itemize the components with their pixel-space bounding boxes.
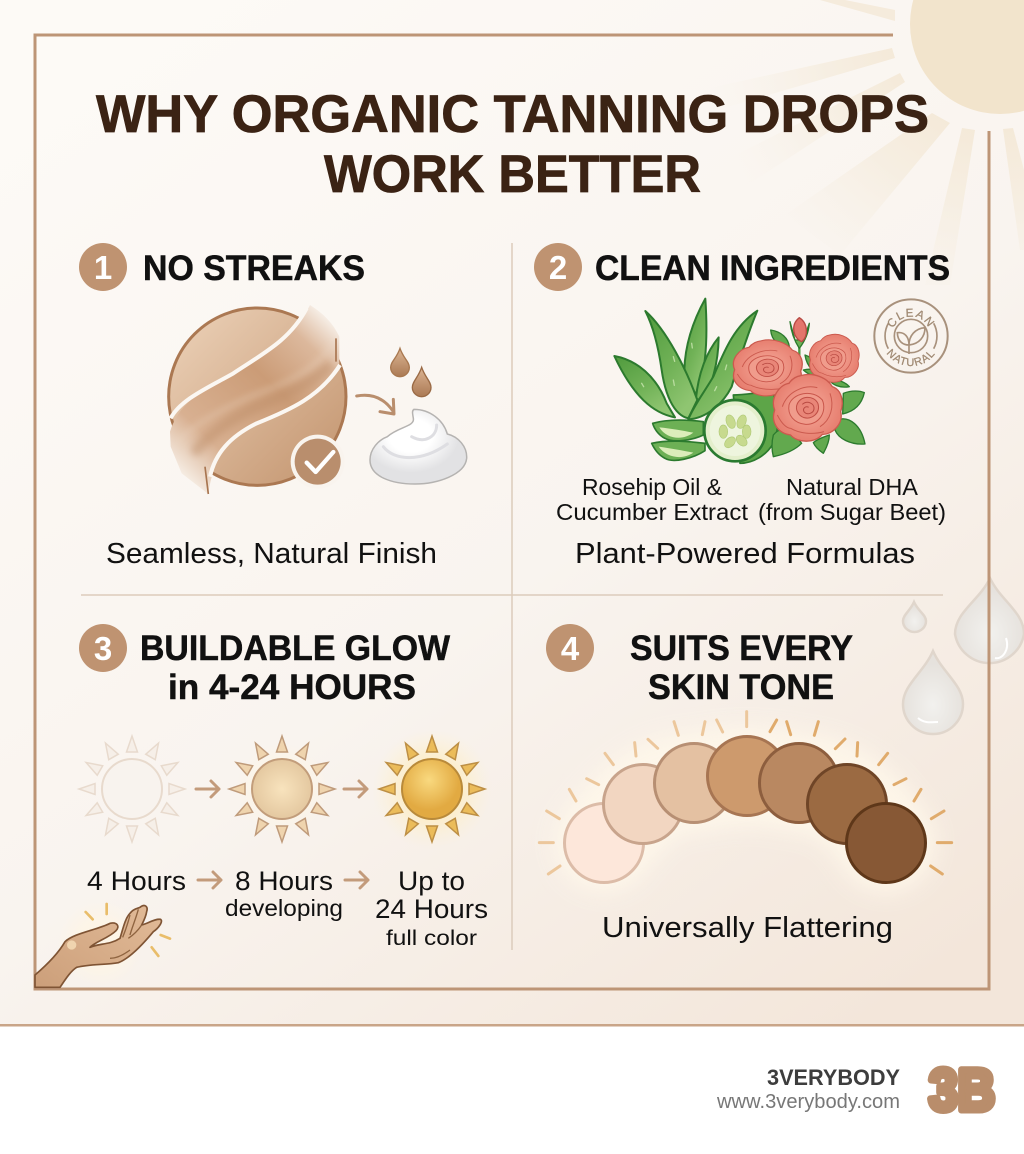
title: WORK BETTER [324, 145, 701, 204]
heading: suits every skin tone: SUITS EVERY [630, 629, 853, 668]
ingredient label: natural DHA: (from Sugar Beet) [758, 499, 946, 525]
water drops decoration [903, 578, 1024, 734]
panel: suits every skin tone [539, 624, 952, 944]
heading: suits every skin tone: SKIN TONE [648, 668, 834, 707]
panel: clean ingredients [534, 243, 950, 570]
badge: clean natural [873, 298, 949, 374]
arrow [345, 872, 368, 888]
number badge 1: 1 [94, 249, 112, 286]
icon: skin disc with smooth swoosh [169, 305, 346, 494]
panel: no streaks [79, 243, 467, 570]
number badge 4: 4 [561, 630, 580, 667]
heading: buildable glow [140, 629, 450, 707]
arrow [198, 872, 221, 888]
heading: clean ingredients: CLEAN INGREDIENTS [595, 249, 950, 288]
icon: aloe, cucumber and roses [614, 299, 865, 463]
footer brand text: 3VERYBODY [767, 1065, 900, 1090]
icon: medium sun at 8 hours [229, 736, 335, 842]
icon: faint sun at 4 hours [79, 736, 185, 842]
icon: drops, arrow and cream [357, 348, 467, 484]
heading: no streaks: NO STREAKS [143, 249, 365, 288]
footer brand text [716, 1065, 900, 1113]
label: 8 hours developing: developing [225, 895, 343, 921]
ingredient label: rosehip and cucumber [556, 474, 749, 525]
ingredient label: natural DHA: Natural DHA [786, 474, 919, 500]
footer band [0, 1024, 1024, 1154]
chart: skin tone swatches arc [539, 712, 952, 882]
number badge 3 [79, 624, 127, 672]
badge: clean natural: CLEAN [888, 308, 934, 327]
number badge 4 [546, 624, 594, 672]
arrow [196, 781, 219, 797]
heading: buildable glow: BUILDABLE GLOW [140, 629, 450, 668]
badge: clean natural: NATURAL [886, 348, 935, 366]
number badge 1 [79, 243, 127, 291]
label: 8 hours developing: 8 Hours [235, 866, 333, 896]
title [96, 85, 929, 204]
corner sun with rays [700, 0, 1024, 285]
footer brand text: www.3verybody.com [716, 1091, 900, 1113]
ingredient label: rosehip and cucumber: Cucumber Extract [556, 499, 749, 525]
ingredient label: natural DHA [758, 474, 946, 525]
title: WHY ORGANIC TANNING DROPS [96, 85, 929, 144]
label: 8 hours developing [225, 866, 343, 921]
arrow [344, 781, 367, 797]
caption: Universally Flattering [602, 912, 893, 944]
icon: golden sun at 24 hours [372, 729, 492, 849]
number badge 2 [534, 243, 582, 291]
caption: Plant-Powered Formulas [575, 538, 915, 570]
number badge 3: 3 [94, 630, 112, 667]
number badge 2: 2 [549, 249, 567, 286]
icon: glowing hand [35, 900, 170, 987]
panel: buildable glow [35, 624, 492, 987]
ingredient label: rosehip and cucumber: Rosehip Oil & [582, 474, 722, 500]
decorative frame [35, 35, 989, 989]
label: up to 24 hours full color: full color [386, 927, 477, 950]
logo: 3B: 3B [929, 1058, 995, 1123]
label: up to 24 hours full color [375, 866, 488, 950]
heading: suits every skin tone [630, 629, 853, 707]
caption: Seamless, Natural Finish [106, 538, 437, 570]
label: 4 hours: 4 Hours [87, 866, 186, 896]
label: up to 24 hours full color: 24 Hours [375, 894, 488, 924]
label: up to 24 hours full color: Up to [398, 866, 465, 896]
heading: buildable glow: in 4-24 HOURS [168, 668, 416, 707]
